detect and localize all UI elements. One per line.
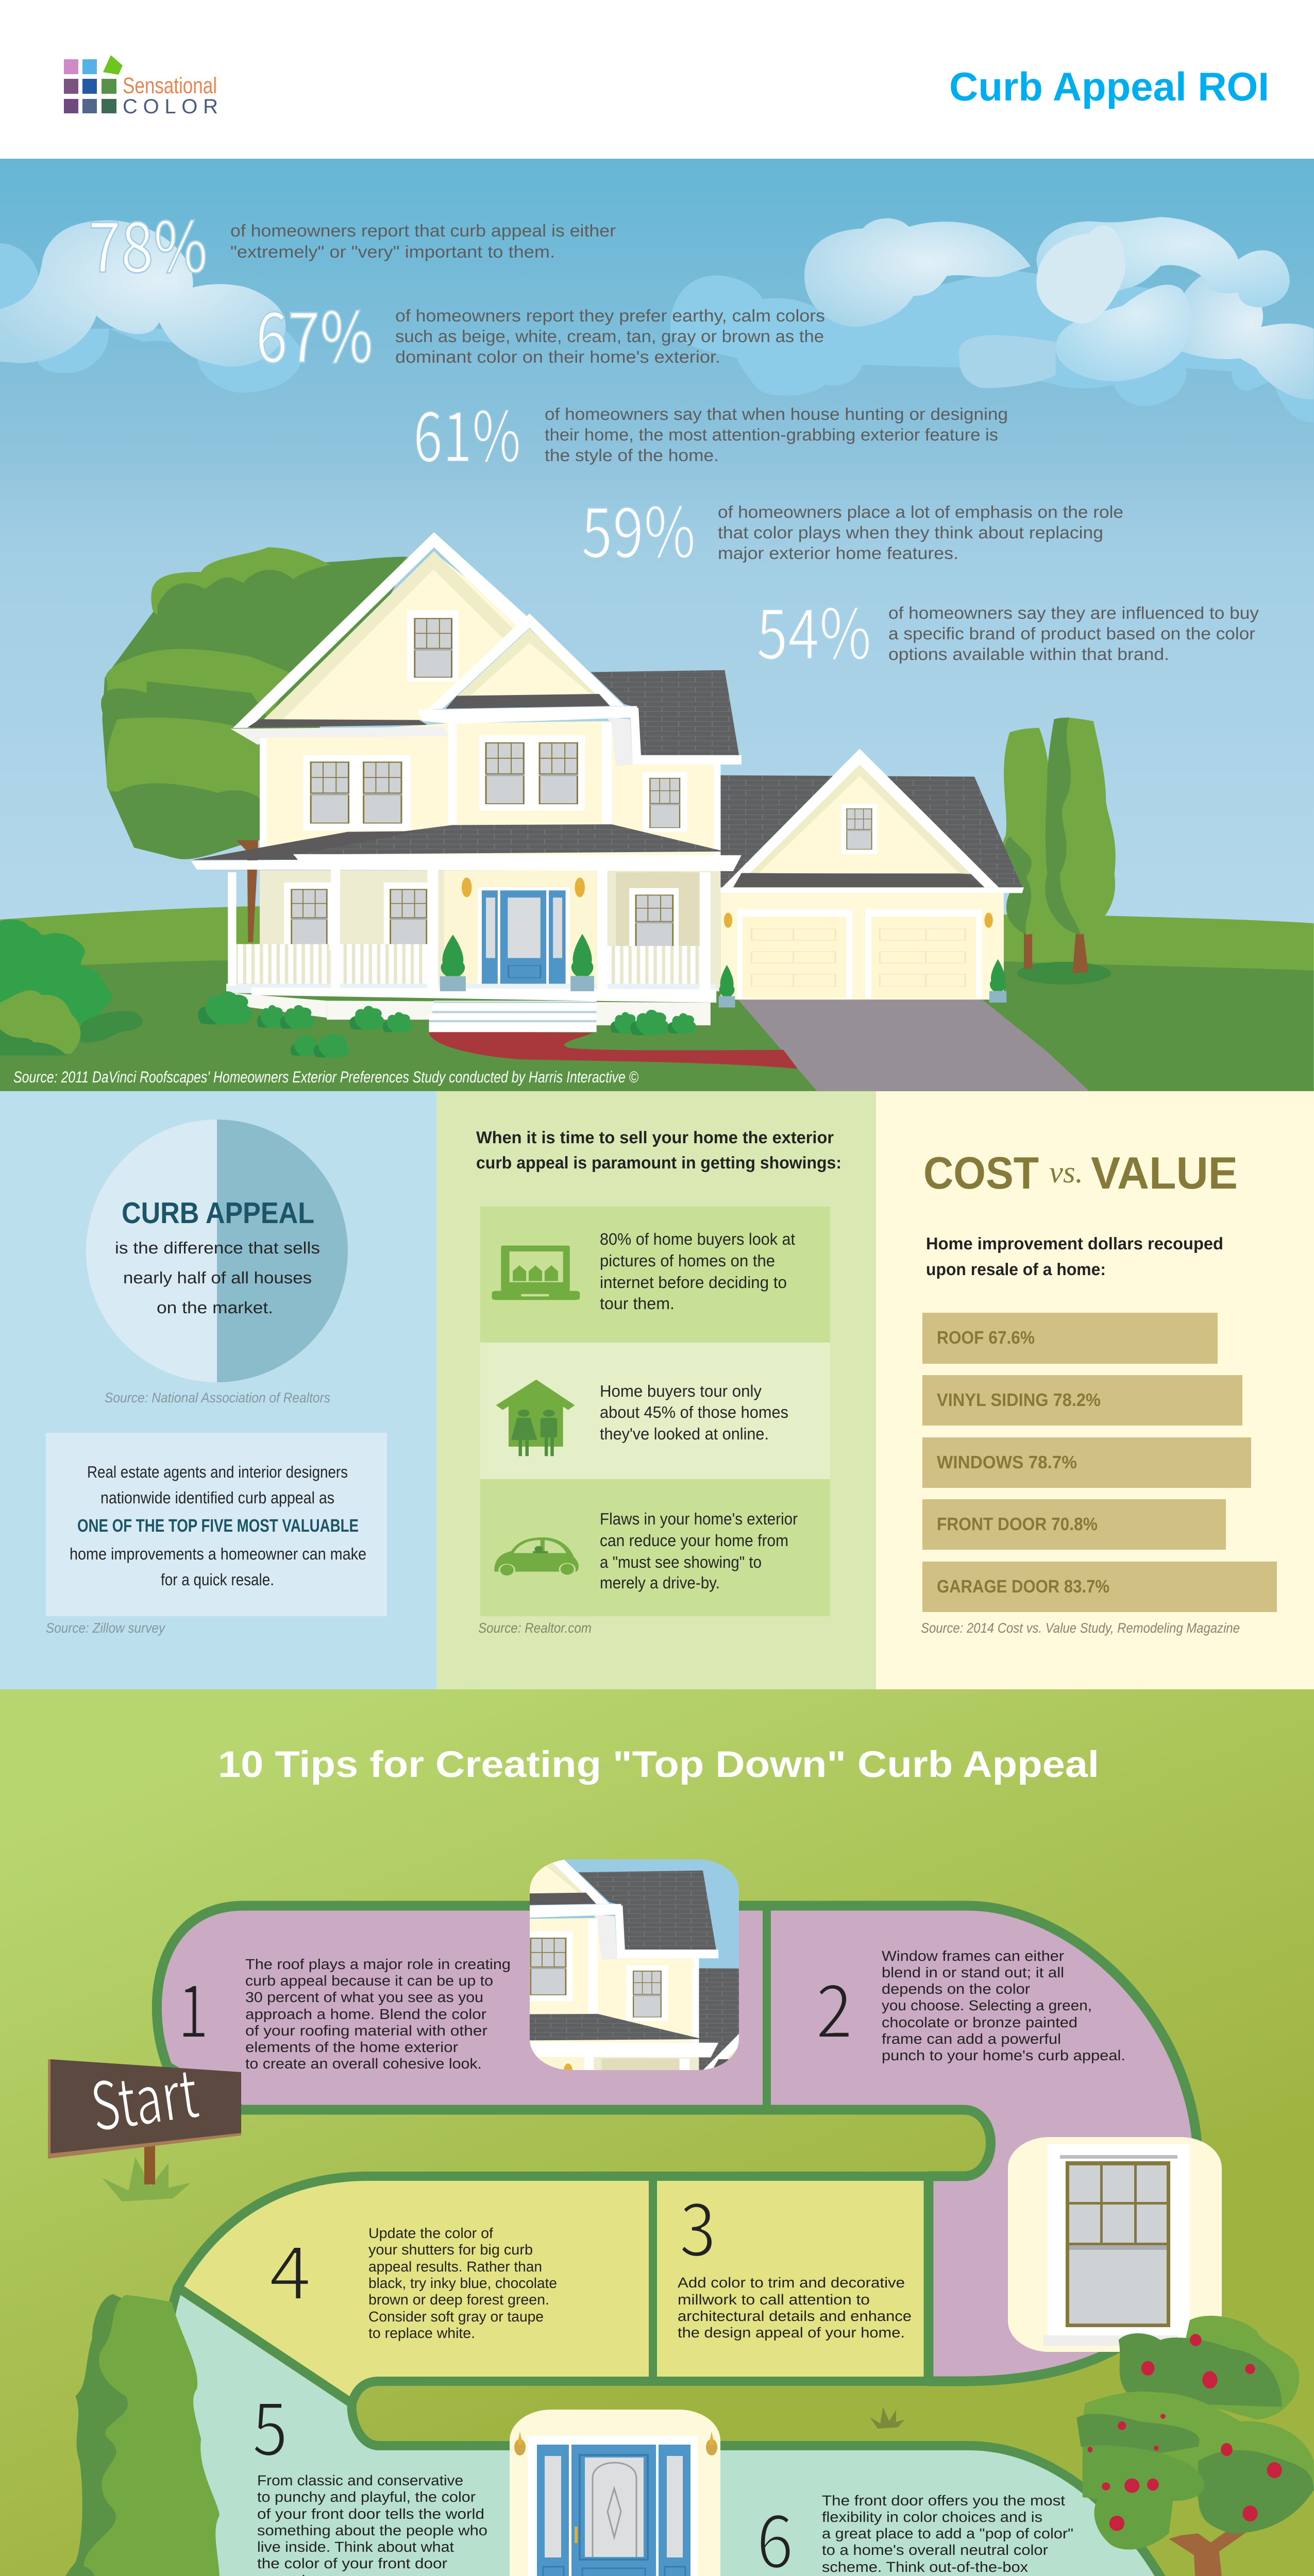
path: tips 5 and 6 <box>161 2287 1194 2576</box>
stat 54%: a specific brand of product based on the color <box>888 624 1255 643</box>
source: Source: Realtor.com <box>478 1620 592 1636</box>
tip 5: 5 <box>252 2370 288 2477</box>
source: Source: Zillow survey <box>46 1620 165 1636</box>
bar chart <box>922 1313 1277 1612</box>
stat 59%: major exterior home features. <box>718 544 958 563</box>
curb appeal statement: CURB APPEAL <box>122 1196 314 1230</box>
tip 2: chocolate or bronze painted <box>882 2014 1077 2030</box>
fact: flaws: can reduce your home from <box>600 1531 788 1550</box>
tip 5: live inside. Think about what <box>257 2539 454 2555</box>
tip 3: 3 <box>679 2171 716 2278</box>
callout: top five: for a quick resale. <box>161 1570 274 1589</box>
tip 1: of your roofing material with other <box>245 2023 487 2039</box>
stat 54%: options available within that brand. <box>888 645 1169 664</box>
bar: front door: FRONT DOOR 70.8% <box>937 1514 1098 1534</box>
stat 67% <box>256 281 825 382</box>
curb appeal statement <box>115 1196 320 1317</box>
tip 6 <box>756 2483 1073 2576</box>
heading: 10 Tips for Creating "Top Down" Curb Appeal <box>218 1744 1099 1785</box>
stat 59%: of homeowners place a lot of emphasis on the role <box>718 502 1123 521</box>
stat 61% <box>413 381 1008 482</box>
header <box>64 55 1269 118</box>
sign: start: Start <box>84 2040 204 2151</box>
tip 3: the design appeal of your home. <box>678 2325 905 2341</box>
bar: windows: WINDOWS 78.7% <box>937 1452 1077 1472</box>
card: front door <box>510 2410 720 2576</box>
tip 5: the color of your front door <box>257 2555 447 2571</box>
callout: top five: nationwide identified curb appeal as <box>100 1488 334 1507</box>
heading <box>923 1147 1238 1198</box>
panel: 10 tips <box>0 1689 1314 2576</box>
fact: tours: they've looked at online. <box>600 1425 769 1443</box>
tip 2: frame can add a powerful <box>882 2031 1061 2047</box>
card: roof photo <box>530 1859 739 2070</box>
icon: house with people <box>496 1380 575 1456</box>
stat 54% <box>756 578 1259 679</box>
tip 4: brown or deep forest green. <box>368 2292 549 2308</box>
curb appeal statement: on the market. <box>157 1298 273 1317</box>
bar: windows <box>922 1437 1251 1488</box>
curb appeal statement: nearly half of all houses <box>123 1268 312 1287</box>
stat 67%: of homeowners report they prefer earthy, calm colors <box>395 306 825 325</box>
tip 1 <box>178 1953 511 2072</box>
tip 3: architectural details and enhance <box>678 2308 912 2324</box>
stat 59%: that color plays when they think about replacing <box>718 523 1103 542</box>
stat 61%: their home, the most attention-grabbing exterior feature is <box>545 425 998 444</box>
tip 1: The roof plays a major role in creating <box>245 1956 511 1972</box>
tip 4: your shutters for big curb <box>368 2242 533 2258</box>
clouds <box>0 217 1314 422</box>
card: window <box>1008 2137 1222 2352</box>
tip 6: The front door offers you the most <box>822 2493 1065 2509</box>
heading: vs. <box>1049 1155 1083 1189</box>
logo: Sensational Color: COLOR <box>123 95 218 118</box>
tip 2: depends on the color <box>882 1981 1030 1997</box>
stat 61%: of homeowners say that when house hunting or designing <box>545 404 1008 423</box>
stat 78%: "extremely" or "very" important to them. <box>230 242 555 261</box>
stat 78%: of homeowners report that curb appeal is either <box>230 221 616 240</box>
sky <box>0 159 1314 1092</box>
heading <box>476 1128 841 1172</box>
tip 5: something about the people who <box>257 2522 487 2538</box>
stat 67%: dominant color on their home's exterior. <box>395 347 720 366</box>
source: Source: National Association of Realtors <box>105 1390 330 1405</box>
callout: top five: home improvements a homeowner can make <box>70 1545 366 1563</box>
tip 1: approach a home. Blend the color <box>245 2006 486 2022</box>
curb appeal statement: is the difference that sells <box>115 1239 320 1257</box>
tip 5: From classic and conservative <box>257 2472 463 2488</box>
fact: pictures online: internet before deciding to <box>600 1273 787 1292</box>
tip 3: millwork to call attention to <box>678 2292 870 2308</box>
heading: When it is time to sell your home the exterior <box>476 1128 834 1147</box>
stat 61%: 61% <box>413 381 521 482</box>
heading: curb appeal is paramount in getting showings: <box>476 1153 841 1172</box>
fact: pictures online: tour them. <box>600 1294 675 1313</box>
stat 78%: 78% <box>88 191 208 292</box>
scene: lawn, trees, house <box>0 532 1314 1091</box>
shrubs <box>0 920 1006 1058</box>
title: Curb Appeal ROI <box>949 64 1269 109</box>
source note: Source: 2011 DaVinci Roofscapes' Homeowners Exterior Preferences Study conducted by Harris Interactive © <box>13 1068 638 1086</box>
fact: pictures online <box>480 1207 830 1343</box>
bar: roof <box>922 1313 1218 1364</box>
fact: tours: about 45% of those homes <box>600 1403 788 1421</box>
bar: vinyl siding <box>922 1375 1242 1426</box>
stat 59% <box>581 477 1123 578</box>
tip 6: scheme. Think out-of-the-box <box>822 2559 1028 2575</box>
icon: car <box>494 1537 579 1576</box>
tip 3 <box>678 2171 912 2341</box>
bar: front door <box>922 1499 1226 1550</box>
tip 4: to replace white. <box>368 2325 475 2341</box>
callout: top five: Real estate agents and interior designers <box>87 1463 348 1481</box>
bar: roof: ROOF 67.6% <box>937 1328 1035 1348</box>
tip 1: curb appeal because it can be up to <box>245 1973 493 1989</box>
fact: flaws: merely a drive-by. <box>600 1573 720 1592</box>
tip 5: to punchy and playful, the color <box>257 2489 476 2505</box>
path dividers <box>541 1906 771 2576</box>
card: porch <box>0 2341 1113 2576</box>
stat 59%: 59% <box>581 477 696 578</box>
source: Source: 2014 Cost vs. Value Study, Remodeling Magazine <box>921 1620 1240 1636</box>
tip 2: blend in or stand out; it all <box>882 1964 1064 1980</box>
stat 54%: of homeowners say they are influenced to buy <box>888 603 1259 622</box>
callout: top five <box>46 1433 387 1616</box>
tip 6: flexibility in color choices and is <box>822 2509 1042 2525</box>
tip 5 <box>252 2370 487 2576</box>
logo: Sensational Color <box>64 55 218 118</box>
subheading: upon resale of a home: <box>926 1260 1106 1279</box>
heading: VALUE <box>1091 1147 1238 1198</box>
hero panel: sky, stats and house <box>0 159 1314 1092</box>
tip 6: to a home's overall neutral color <box>822 2542 1048 2558</box>
tip 1: 1 <box>178 1953 209 2059</box>
tree: apple <box>1076 2316 1314 2576</box>
sign: start <box>48 2040 241 2201</box>
stat 61%: the style of the home. <box>545 446 719 465</box>
tip 4: 4 <box>269 2214 311 2321</box>
path: tips 3 and 4 <box>178 2176 929 2403</box>
tip 3: Add color to trim and decorative <box>678 2275 905 2291</box>
bar: garage door: GARAGE DOOR 83.7% <box>937 1577 1109 1597</box>
fact: flaws <box>480 1479 830 1616</box>
fact: tours: Home buyers tour only <box>600 1382 762 1400</box>
tip 2: punch to your home's curb appeal. <box>882 2047 1125 2063</box>
path: tips 1 and 2 <box>157 1906 1197 2381</box>
tip 6: a great place to add a "pop of color" <box>822 2526 1073 2541</box>
tip 1: elements of the home exterior <box>245 2039 458 2055</box>
tip 4: appeal results. Rather than <box>368 2259 542 2275</box>
pie chart <box>86 1120 348 1382</box>
subheading: Home improvement dollars recouped <box>926 1234 1223 1253</box>
tree: poplar <box>60 2294 220 2576</box>
stat 67%: such as beige, white, cream, tan, gray or brown as the <box>395 327 824 346</box>
tip 4 <box>269 2214 557 2341</box>
house <box>191 532 1024 1032</box>
subheading <box>926 1234 1223 1279</box>
stat 54%: 54% <box>756 578 871 679</box>
logo: Sensational Color: Sensational <box>123 73 217 98</box>
heading: COST <box>923 1147 1039 1198</box>
tip 2: Window frames can either <box>882 1948 1064 1964</box>
fact: pictures online: 80% of home buyers look at <box>600 1230 795 1248</box>
panel: curb appeal <box>0 1091 436 1689</box>
fact: tours <box>480 1343 830 1479</box>
fact: flaws: Flaws in your home's exterior <box>600 1510 798 1528</box>
tip 1: to create an overall cohesive look. <box>245 2056 482 2072</box>
tip 2 <box>816 1948 1125 2063</box>
tip 5: of your front door tells the world <box>257 2506 484 2522</box>
tip 4: Update the color of <box>368 2225 493 2241</box>
callout: top five: ONE OF THE TOP FIVE MOST VALUABLE <box>77 1516 359 1536</box>
tip 4: black, try inky blue, chocolate <box>368 2275 557 2291</box>
bar: garage door <box>922 1562 1277 1612</box>
tip 1: 30 percent of what you see as you <box>245 1989 483 2005</box>
tip 2: 2 <box>816 1953 853 2059</box>
panel: showings <box>436 1091 876 1689</box>
stat 67%: 67% <box>256 281 373 382</box>
bar: vinyl siding: VINYL SIDING 78.2% <box>937 1390 1101 1410</box>
stat 78% <box>88 191 616 292</box>
panel: cost vs value <box>876 1091 1314 1689</box>
fact: pictures online: pictures of homes on the <box>600 1251 775 1270</box>
fact: flaws: a "must see showing" to <box>600 1553 762 1571</box>
icon: laptop <box>492 1246 580 1300</box>
grass tufts <box>115 2407 1274 2576</box>
tip 4: Consider soft gray or taupe <box>368 2309 544 2325</box>
tip 2: you choose. Selecting a green, <box>882 1997 1092 2013</box>
